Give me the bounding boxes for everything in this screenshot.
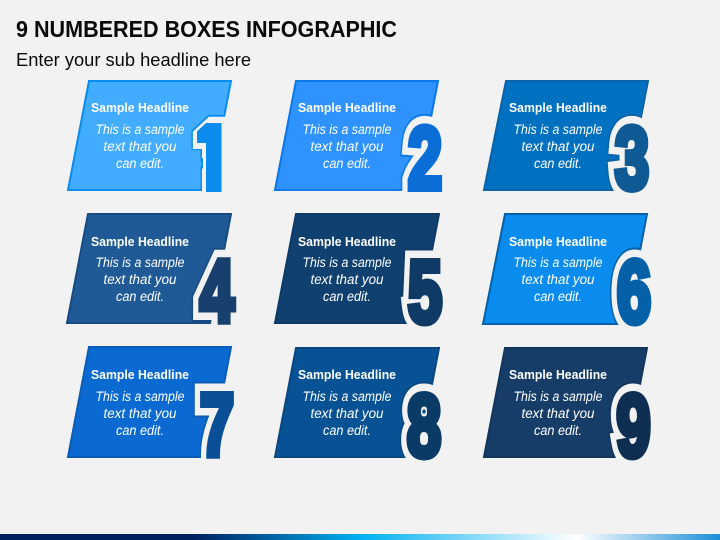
box 1: can edit. [116,156,164,171]
box 9: 9 [616,377,651,476]
box 3: 3 [615,110,649,208]
box 7: text that you [104,406,177,421]
box 4: can edit. [116,289,164,304]
box 8: can edit. [323,423,371,438]
box 4 [67,214,234,341]
box 8 [275,348,441,476]
box 7: 7 [200,377,234,475]
box 3: 3 [615,110,649,208]
box 1: 1 [196,110,231,208]
box 4: text that you [104,272,177,287]
box 6: 6 [617,243,651,342]
box 8: This is a sample [302,389,392,404]
box 8: Sample Headline [298,367,396,382]
box 6: text that you [522,272,595,287]
box 7: Sample Headline [91,367,189,382]
box 8: 8 [407,377,441,476]
box 9: This is a sample [514,389,602,404]
box 2: text that you [310,139,384,154]
box 2: Sample Headline [298,100,396,115]
box 4: Sample Headline [91,234,189,249]
box 8: 8 [407,377,441,476]
bottom gradient bar [0,534,720,540]
box 1: 1 [196,110,231,208]
box 7: 7 [200,377,234,475]
box 5: 5 [408,243,442,342]
box 3 [482,80,650,193]
box 7 [66,346,234,459]
box 4: This is a sample [96,255,184,270]
box 8: 8 [407,377,441,476]
box 4: 4 [200,243,234,341]
box 5 [275,214,442,342]
box 9: Sample Headline [509,367,607,382]
box 8: text that you [310,406,384,421]
box 9: can edit. [534,423,582,438]
box 2: 2 [408,110,442,208]
box 5: can edit. [323,289,371,304]
box 3: 3 [615,110,649,208]
box 5: Sample Headline [298,234,396,249]
subtitle: Enter your sub headline here [16,50,251,70]
box 5: This is a sample [302,255,392,270]
box 1: Sample Headline [91,100,189,115]
box 6 [482,213,652,326]
box 2: This is a sample [302,122,392,137]
box 1: text that you [104,139,177,154]
box 5: text that you [310,272,384,287]
box 3: This is a sample [514,122,602,137]
box 9 [482,347,651,460]
box 7: 7 [200,377,234,475]
box 7: can edit. [116,423,164,438]
box 9: 9 [616,377,651,476]
box 4: 4 [200,243,234,341]
box 6: 6 [617,243,651,342]
box 7: This is a sample [96,389,184,404]
box 6: This is a sample [514,255,602,270]
box 2 [274,80,442,192]
box 2: 2 [408,110,442,208]
box 1: 1 [196,110,231,208]
title: 9 NUMBERED BOXES INFOGRAPHIC [16,16,397,42]
box 9: 9 [616,377,651,476]
box 1 [66,80,232,192]
box 4: 4 [200,243,234,341]
box 6: can edit. [534,289,582,304]
box 6: Sample Headline [509,234,607,249]
box 5: 5 [408,243,442,342]
box 2: can edit. [323,156,371,171]
box 1: This is a sample [96,122,184,137]
box 3: text that you [522,139,595,154]
box 6: 6 [617,243,651,342]
box 5: 5 [408,243,442,342]
box 3: can edit. [534,156,582,171]
box 9: text that you [522,406,595,421]
box 2: 2 [408,110,442,208]
box 3: Sample Headline [509,100,607,115]
